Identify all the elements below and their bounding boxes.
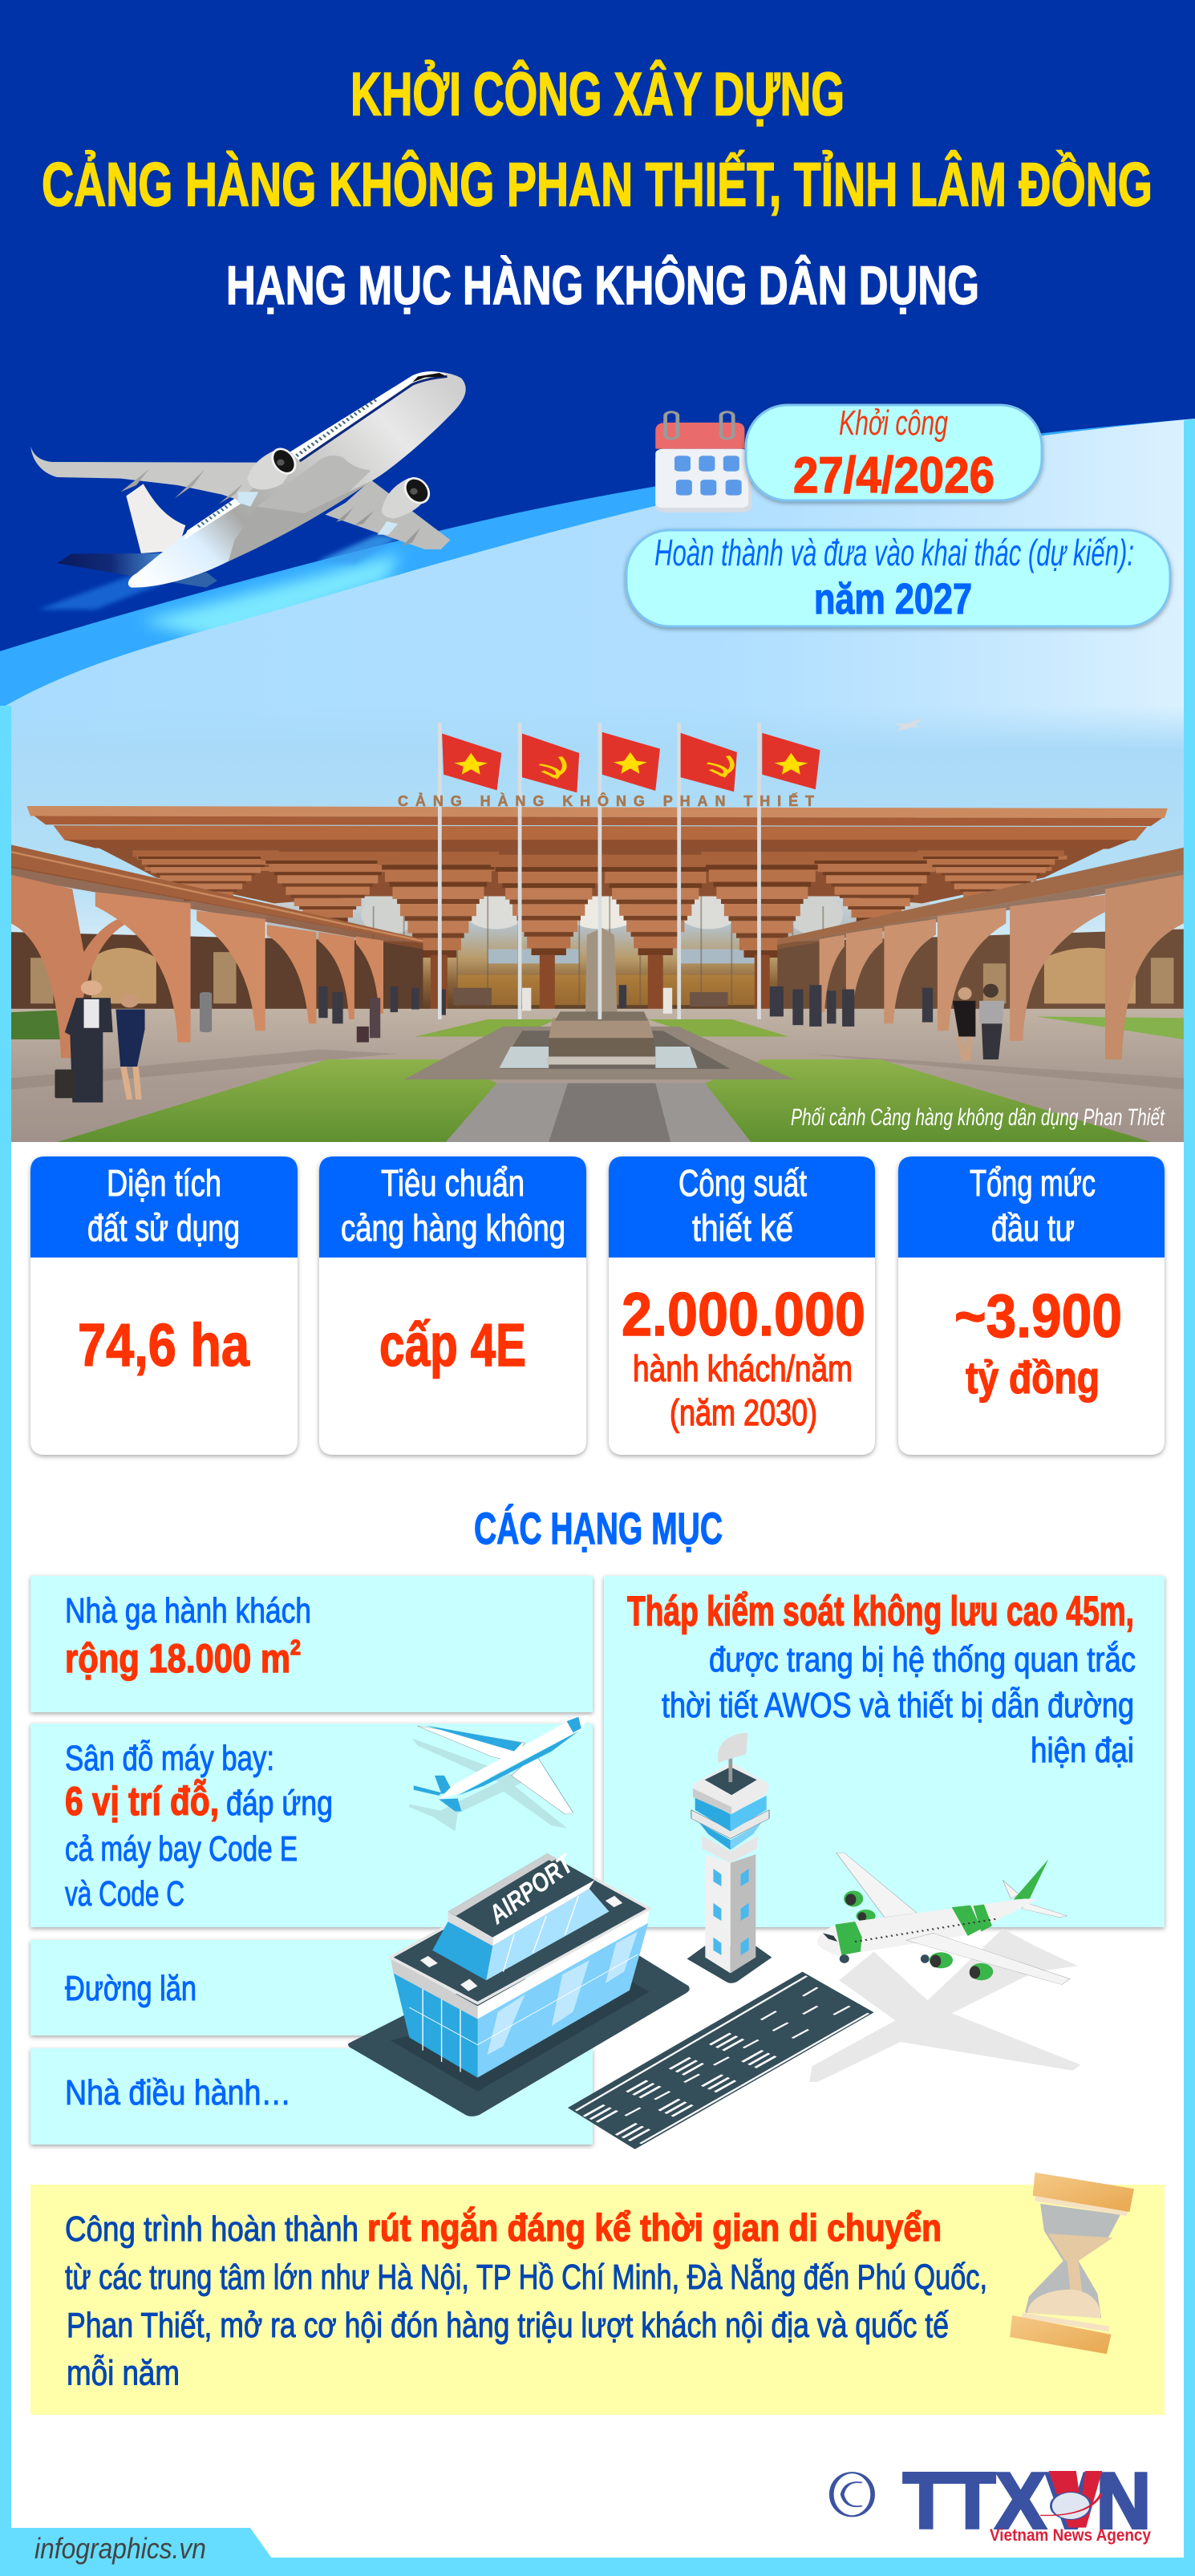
value: completion year: năm 2027 — [814, 575, 972, 623]
panel: operations building — [30, 2048, 593, 2145]
card heading — [679, 1162, 807, 1249]
card value: hành khách/năm — [633, 1348, 853, 1389]
illustration: blue plane on apron — [409, 1715, 589, 1832]
panel: apron: đáp ứng — [226, 1784, 333, 1823]
wave: bright blue band — [0, 419, 1195, 802]
right colonnade — [777, 848, 1184, 945]
card heading — [341, 1162, 565, 1249]
title — [42, 59, 1152, 316]
pill: start date — [746, 403, 1042, 504]
agency name: Vietnam News Agency — [990, 2526, 1151, 2545]
panel: apron: và Code C — [65, 1874, 184, 1914]
value: start date: 27/4/2026 — [793, 448, 994, 504]
card heading: đất sử dụng — [87, 1207, 240, 1249]
photo: terminal perspective — [10, 706, 1185, 1144]
roof — [26, 806, 1168, 818]
wordmark: TTXVN — [903, 2457, 1151, 2545]
illustration: runway — [568, 1972, 874, 2149]
card heading: Diện tích — [107, 1162, 221, 1204]
panel: apron: cả máy bay Code E — [65, 1829, 298, 1869]
text: lines 2 to 4: Phan Thiết, mở ra cơ hội đón hàng triệu lượt khách nội địa và quốc tế — [67, 2306, 949, 2345]
side interiors — [10, 932, 423, 1010]
text: line 1: Công trình hoàn thành — [65, 2209, 358, 2249]
ground — [10, 1009, 1185, 1144]
icon: airplane taking off — [30, 371, 466, 610]
illustration: green plane — [809, 1853, 1080, 2082]
highlight: terminal area: rộng 18.000 m — [65, 1636, 290, 1681]
copyright mark — [832, 2473, 873, 2516]
card value: ~3.900 — [954, 1282, 1122, 1351]
light sky area — [0, 419, 1195, 802]
card value: 74,6 ha — [78, 1311, 250, 1379]
card heading: cảng hàng không — [341, 1207, 565, 1249]
card heading: thiết kế — [692, 1207, 793, 1249]
card value — [622, 1281, 865, 1433]
panel: apron: Sân đỗ máy bay: — [65, 1739, 274, 1778]
card heading — [970, 1162, 1096, 1249]
title line 1: KHỞI CÔNG XÂY DỰNG — [350, 59, 845, 128]
background: navy header — [0, 0, 1195, 722]
left colonnade — [10, 844, 423, 943]
highlight: six stands: 6 vị trí đỗ, — [65, 1779, 219, 1824]
sky wash right — [0, 419, 1195, 802]
icon: hourglass — [1010, 2173, 1134, 2354]
highlight: shortened travel time: rút ngắn đáng kể thời gian di chuyển — [367, 2206, 942, 2249]
pill: completion — [626, 530, 1170, 626]
card: land area — [30, 1156, 298, 1455]
card: design capacity — [609, 1156, 875, 1455]
card value: 2.000.000 — [622, 1281, 865, 1349]
card value: (năm 2030) — [670, 1392, 817, 1433]
text: lines 2 to 4 — [65, 2258, 987, 2393]
panel: taxiway: Đường lăn — [65, 1969, 196, 2008]
card: airport standard — [319, 1156, 586, 1455]
card: total investment — [898, 1156, 1165, 1455]
panel: control tower — [604, 1576, 1165, 1927]
panel: apron — [30, 1723, 593, 1927]
building sign: CẢNG HÀNG KHÔNG PHAN THIẾT — [398, 792, 814, 809]
panel: control tower: hiện đại — [1031, 1731, 1134, 1770]
panel: passenger terminal: Nhà ga hành khách — [65, 1591, 311, 1630]
panel: taxiway — [30, 1940, 593, 2035]
card heading: Công suất — [679, 1162, 807, 1204]
people: front couple — [55, 980, 1004, 1103]
red V and globe — [1040, 2471, 1102, 2528]
website: infographics.vn — [34, 2532, 206, 2565]
small distant plane — [893, 718, 924, 731]
card heading: Tiêu chuẩn — [381, 1162, 525, 1204]
card value — [954, 1282, 1122, 1403]
panel: passenger terminal: 2 — [290, 1635, 301, 1659]
flags and poles — [440, 723, 820, 1019]
illustration: control tower — [687, 1732, 772, 1983]
card heading: Tổng mức — [970, 1162, 1096, 1204]
card value: tỷ đồng — [966, 1352, 1100, 1403]
card value: cấp 4E — [379, 1311, 526, 1379]
panel: passenger terminal — [30, 1576, 593, 1712]
heading: cac hang muc: CÁC HẠNG MỤC — [474, 1503, 723, 1553]
people: crowd — [200, 985, 933, 1043]
illustration: airport terminal — [348, 1853, 690, 2116]
footer tab — [0, 2528, 272, 2576]
icon: calendar — [655, 412, 751, 512]
label: khoi cong: Khởi công — [839, 403, 948, 443]
card heading: đầu tư — [991, 1207, 1075, 1249]
panel: summary callout — [30, 2185, 1165, 2415]
wave glow — [140, 553, 401, 642]
text: airport sign: AIRPORT — [483, 1848, 580, 1930]
card heading — [87, 1162, 240, 1249]
text: lines 2 to 4: mỗi năm — [67, 2353, 180, 2393]
panel: operations building: Nhà điều hành… — [65, 2073, 291, 2112]
logo: TTXVN — [832, 2457, 1151, 2545]
